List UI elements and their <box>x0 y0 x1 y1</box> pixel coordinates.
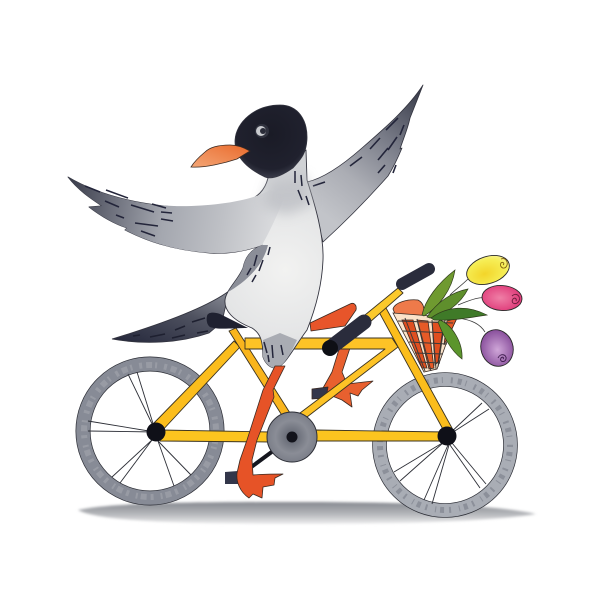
front wheel <box>380 380 510 510</box>
basket <box>393 300 457 372</box>
neck shading <box>262 176 312 215</box>
tail <box>112 291 229 342</box>
front leg and foot <box>237 366 285 498</box>
seat <box>207 313 248 329</box>
frame: stem <box>365 288 403 322</box>
head <box>191 105 307 178</box>
ground shadow <box>78 502 536 524</box>
basket with flowers <box>393 250 523 372</box>
frame: rear diagonal tube <box>153 341 240 433</box>
tulip: yellow <box>463 250 513 290</box>
frame: seat tube <box>229 328 290 417</box>
back leg and foot <box>310 303 373 407</box>
leaves <box>422 270 487 359</box>
tulip: purple <box>476 325 518 371</box>
body and left wing <box>68 150 323 368</box>
frame: lower chain stay <box>160 430 270 442</box>
lower handlebar grip <box>322 322 364 356</box>
frame: head tube <box>379 308 452 433</box>
left wing shading <box>68 177 285 253</box>
beak <box>191 145 250 167</box>
tulip stems <box>450 279 485 332</box>
front hub <box>438 426 456 446</box>
bicycle frame <box>153 288 452 442</box>
frame: top tube and down tube <box>245 338 398 417</box>
upper handlebar grip <box>402 269 429 284</box>
rear wheel <box>83 364 217 498</box>
crank disc and arm <box>225 412 317 484</box>
tulip: pink <box>481 284 523 312</box>
right wing <box>307 85 423 242</box>
frame: lower right bar <box>316 430 445 441</box>
rear hub <box>146 422 166 442</box>
eye <box>255 124 269 138</box>
